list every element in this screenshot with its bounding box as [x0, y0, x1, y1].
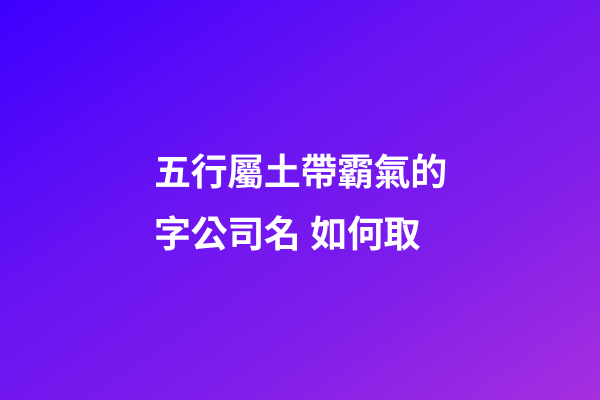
title: [154, 152, 447, 255]
title line 2: 字公司名 如何取: [154, 214, 420, 255]
title line 1: 五行屬土帶霸氣的: [154, 152, 447, 193]
